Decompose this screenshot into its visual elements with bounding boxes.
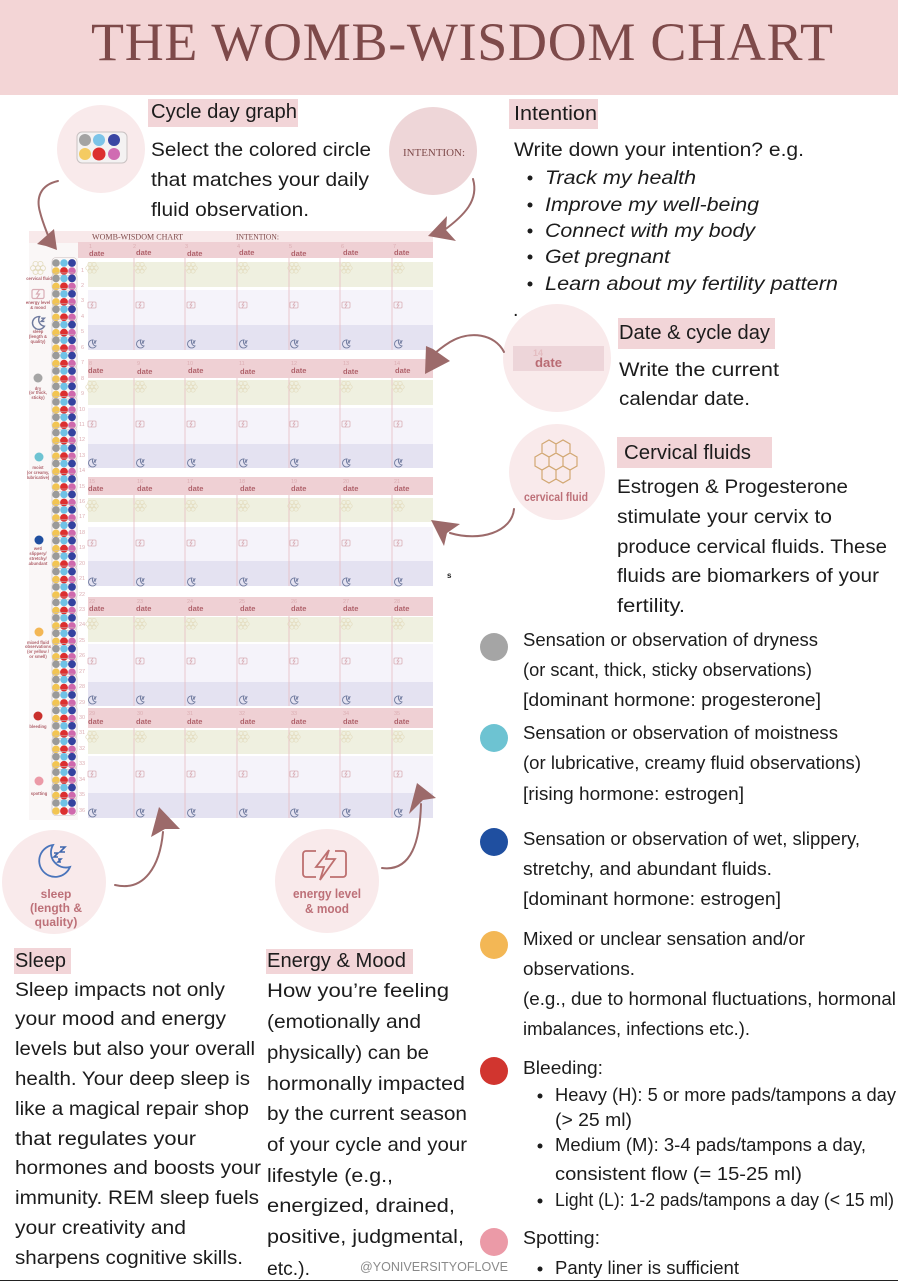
chart legend column: abundant [29, 561, 48, 566]
date cells: 5 [289, 244, 292, 250]
date cells: date [187, 717, 202, 726]
chart legend column: mixed fluid [27, 640, 49, 645]
legend: moistness: [rising hormone: estrogen] [523, 784, 744, 804]
row numbers: 35 [79, 792, 85, 798]
date cells: 31 [187, 711, 193, 717]
arrow: energy to chart [382, 783, 436, 868]
icon: sleep circle: (length & [30, 901, 82, 915]
chart legend column: (or creamy, [27, 470, 49, 475]
date cells: 7 [393, 244, 396, 250]
date cells: date [239, 248, 254, 257]
legend: wet: stretchy, and abundant fluids. [523, 859, 772, 879]
row numbers: 7 [81, 360, 84, 366]
row numbers: 31 [79, 730, 85, 736]
text: energy and mood: by the current season [267, 1103, 467, 1125]
chart legend column [25, 261, 52, 796]
legend: moistness: (or lubricative, creamy fluid observations) [523, 753, 861, 773]
text: cervical fluids: Estrogen & Progesterone [617, 476, 848, 498]
row numbers: 22 [79, 592, 85, 598]
womb-wisdom chart: WOMB-WISDOM CHART [92, 232, 183, 242]
row numbers: 32 [79, 746, 85, 752]
chart legend column: wet/ [33, 546, 43, 551]
date cells: 10 [187, 361, 193, 367]
date cells: date [188, 484, 203, 493]
row numbers: 18 [79, 530, 85, 536]
chart legend column: or smell) [29, 654, 47, 659]
legend: mixed: (e.g., due to hormonal fluctuations, hormonal [523, 989, 896, 1009]
text: energy and mood: physically) can be [267, 1042, 429, 1064]
icon: cervical fluid circle [509, 424, 605, 520]
date cells: 2 [133, 244, 136, 250]
date cells: 21 [394, 479, 400, 485]
date cells: date [88, 717, 103, 726]
legend: wet [480, 828, 860, 909]
date cells: date [240, 717, 255, 726]
date cells: 8 [89, 361, 92, 367]
chart legend column: lubricative) [27, 475, 50, 480]
row numbers: 12 [79, 437, 85, 443]
date cells: 15 [89, 479, 95, 485]
text: energy and mood: hormonally impacted [267, 1073, 465, 1095]
date cells: date [136, 604, 151, 613]
icon: intention circle: INTENTION: [403, 147, 465, 159]
date cells: 23 [137, 599, 143, 605]
text: intention list: Get pregnant [545, 246, 672, 268]
row numbers: 26 [79, 653, 85, 659]
text: cervical fluids: fertility. [617, 595, 685, 617]
row numbers: 21 [79, 576, 85, 582]
date cells: date [343, 248, 358, 257]
heading: energy and mood: Energy & Mood [267, 950, 406, 972]
chart legend column: stretchy/ [29, 556, 48, 561]
legend: dryness: (or scant, thick, sticky observations) [523, 660, 812, 680]
text: sleep: that regulates your [15, 1128, 197, 1150]
heading: date and cycle day: Date & cycle day [619, 322, 770, 344]
date cells [88, 244, 410, 726]
row numbers: 30 [79, 715, 85, 721]
date cells: 17 [187, 479, 193, 485]
date cells: date [188, 366, 203, 375]
date cells: 28 [394, 599, 400, 605]
row numbers: 13 [79, 453, 85, 459]
chart legend column: quality) [31, 339, 46, 344]
title banner: THE WOMB-WISDOM CHART [91, 12, 833, 72]
date cells: 33 [291, 711, 297, 717]
date cells: date [343, 367, 358, 376]
heading: cervical fluids: Cervical fluids [624, 442, 751, 464]
date cells: date [394, 717, 409, 726]
row numbers: 25 [79, 638, 85, 644]
legend: moistness: Sensation or observation of moistness [523, 723, 838, 743]
row numbers: 33 [79, 761, 85, 767]
row numbers: 28 [79, 684, 85, 690]
text: sleep: immunity. REM sleep fuels [15, 1187, 259, 1209]
legend: wet: Sensation or observation of wet, slippery, [523, 829, 860, 849]
date cells: date [394, 248, 409, 257]
text: date and cycle day: Write the current [619, 359, 780, 381]
chart legend column: (or thick, [29, 390, 47, 395]
date cells: 26 [291, 599, 297, 605]
chart legend column: (length & [29, 334, 47, 339]
text: sleep: like a magical repair shop [15, 1098, 249, 1120]
row numbers: 11 [79, 422, 85, 428]
arrow: cervical fluid to chart [431, 509, 514, 546]
chart legend column: slippery/ [29, 551, 47, 556]
date cells: date [137, 484, 152, 493]
text: energy and mood: (emotionally and [267, 1011, 421, 1033]
text: date and cycle day: calendar date. [619, 388, 750, 410]
text: cervical fluids: fluids are biomarkers of your [617, 565, 880, 587]
text: cycle day graph: that matches your daily [151, 169, 369, 191]
legend: spotting: Panty liner is sufficient [555, 1258, 739, 1278]
legend: bleeding: Bleeding: [523, 1058, 603, 1078]
week bands [78, 242, 433, 818]
row numbers: 4 [81, 314, 84, 320]
row numbers: 15 [79, 484, 85, 490]
heading: date and cycle day [618, 318, 775, 349]
date cells: date [343, 484, 358, 493]
legend: bleeding: consistent flow (= 15-25 ml) [555, 1164, 802, 1184]
row numbers: 10 [79, 407, 85, 413]
date cells: date [343, 717, 358, 726]
date cells: 30 [137, 711, 143, 717]
icon: energy and mood circle: & mood [305, 901, 349, 916]
date cells: date [395, 366, 410, 375]
text: cycle day graph [151, 139, 371, 221]
text: cervical fluids: stimulate your cervix to [617, 506, 832, 528]
row numbers: 5 [81, 329, 84, 335]
row numbers: 29 [79, 700, 85, 706]
legend: dryness: [dominant hormone: progesterone] [523, 690, 821, 710]
date cells: date [291, 484, 306, 493]
row numbers: 20 [79, 561, 85, 567]
heading: intention: Intention [514, 103, 597, 125]
row numbers: 16 [79, 499, 85, 505]
date cells: date [291, 717, 306, 726]
row numbers: 2 [81, 283, 84, 289]
date cells: 16 [137, 479, 143, 485]
date cells: 20 [343, 479, 349, 485]
chart legend column: dry [35, 386, 42, 391]
legend: wet: [dominant hormone: estrogen] [523, 889, 781, 909]
date cells: date [291, 604, 306, 613]
row numbers: 19 [79, 545, 85, 551]
date cells: date [240, 367, 255, 376]
date cells: 14 [394, 361, 400, 367]
icon: date circle: 14 [533, 348, 543, 358]
legend: bleeding: (> 25 ml) [555, 1110, 632, 1130]
stray letter: s [447, 571, 452, 580]
legend: bleeding [480, 1057, 896, 1210]
icon: sleep circle: sleep [41, 887, 71, 901]
row numbers: 6 [81, 345, 84, 351]
date cells: date [394, 604, 409, 613]
text: cycle day graph: Select the colored circle [151, 139, 371, 161]
text: sleep: hormones and boosts your [15, 1157, 262, 1179]
date cells: 9 [137, 361, 140, 367]
date cells: 25 [239, 599, 245, 605]
row numbers: 23 [79, 607, 85, 613]
womb-wisdom chart: INTENTION: [236, 232, 279, 242]
row numbers: 34 [79, 777, 85, 783]
row numbers: 3 [81, 298, 84, 304]
text: intention list: Learn about my fertility pattern [545, 273, 838, 295]
date cells: 11 [239, 361, 245, 367]
date cells: date [188, 604, 203, 613]
text: intention list: Improve my well-being [545, 194, 759, 216]
date cells: 35 [394, 711, 400, 717]
date cells: 13 [343, 361, 349, 367]
icon: cycle day palette circle [57, 105, 145, 193]
text: sleep: your mood and energy [15, 1008, 226, 1030]
text: sleep: Sleep impacts not only [15, 979, 225, 1001]
title banner [0, 0, 898, 95]
icon: energy and mood circle: energy level [293, 886, 361, 901]
icon: sleep circle [2, 830, 106, 934]
arrow: cycle day to chart [37, 181, 58, 250]
text: energy and mood: How you’re feeling [267, 980, 449, 1002]
cell icons [86, 262, 404, 817]
heading: cycle day graph: Cycle day graph [151, 101, 297, 123]
chart legend column: energy level [26, 300, 50, 305]
row numbers [79, 268, 85, 814]
date cells: 12 [291, 361, 297, 367]
legend: mixed [480, 929, 896, 1039]
chart legend column: spotting [31, 791, 48, 796]
text: intention list [513, 139, 838, 321]
date cells: 29 [89, 711, 95, 717]
date cells: 6 [341, 244, 344, 250]
icon: cervical fluid circle: cervical fluid [524, 490, 588, 504]
row numbers: 36 [79, 808, 85, 814]
icon: date circle [503, 304, 611, 412]
legend: mixed: observations. [523, 959, 635, 979]
text: sleep: levels but also your overall [15, 1038, 255, 1060]
text: intention list: Track my health [545, 167, 696, 189]
arrow: intention to chart [428, 179, 474, 241]
date cells: date [136, 717, 151, 726]
date cells: 22 [89, 599, 95, 605]
date cells: 34 [343, 711, 349, 717]
icon: intention circle [389, 107, 477, 195]
heading: intention [509, 99, 598, 129]
chart legend column: cervical fluid [26, 276, 52, 281]
row numbers: 17 [79, 514, 85, 520]
legend: bleeding: Medium (M): 3-4 pads/tampons a day, [555, 1135, 866, 1155]
date cells: 19 [291, 479, 297, 485]
text: energy and mood: etc.). [267, 1258, 310, 1280]
text: energy and mood: of your cycle and your [267, 1134, 468, 1156]
text: sleep [15, 979, 262, 1269]
date cells: date [89, 249, 104, 258]
legend: mixed: Mixed or unclear sensation and/or [523, 929, 805, 949]
text: sleep: health. Your deep sleep is [15, 1068, 250, 1090]
legend: spotting: Spotting: [523, 1228, 600, 1248]
text: intention list: Write down your intention? e.g. [514, 139, 804, 161]
legend: dryness [480, 630, 821, 710]
chart legend column: sleep [33, 329, 44, 334]
text: cervical fluids [617, 476, 887, 617]
chart legend column: & mood [30, 305, 46, 310]
heading: sleep: Sleep [15, 950, 66, 972]
icon: energy and mood circle [275, 829, 379, 933]
row numbers: 27 [79, 669, 85, 675]
heading: cervical fluids [617, 437, 772, 468]
date cells: 3 [185, 244, 188, 250]
legend: dryness: Sensation or observation of dryness [523, 630, 818, 650]
womb-wisdom chart [25, 231, 433, 820]
chart legend column: sticky) [31, 395, 45, 400]
legend: mixed: imbalances, infections etc.). [523, 1019, 750, 1039]
legend: moistness [480, 723, 861, 804]
date cells: 24 [187, 599, 193, 605]
date cells: date [291, 249, 306, 258]
text: cervical fluids: produce cervical fluids. These [617, 536, 887, 558]
text: cycle day graph: fluid observation. [151, 199, 309, 221]
row numbers: 8 [81, 376, 84, 382]
text: energy and mood: energized, drained, [267, 1195, 455, 1217]
date cells: date [88, 366, 103, 375]
icon: date circle: date [535, 355, 562, 370]
text: date and cycle day [619, 359, 780, 410]
date cells: date [137, 367, 152, 376]
credit handle: @YONIVERSITYOFLOVE [360, 1259, 508, 1274]
date cells: date [343, 604, 358, 613]
row numbers: 9 [81, 391, 84, 397]
date cells: date [187, 249, 202, 258]
text: energy and mood: positive, judgmental, [267, 1226, 464, 1248]
row numbers: 24 [79, 622, 85, 628]
arrow: date to chart [425, 335, 504, 374]
text: intention list: Connect with my body [545, 220, 756, 242]
date cells: date [394, 484, 409, 493]
date cells: 27 [343, 599, 349, 605]
date cells: 1 [89, 244, 92, 250]
chart legend column: (or yellow / [27, 649, 50, 654]
row numbers: 1 [81, 268, 84, 274]
date cells: 32 [239, 711, 245, 717]
date cells: 18 [239, 479, 245, 485]
date cells: date [89, 604, 104, 613]
row numbers: 14 [79, 468, 85, 474]
chart legend column: bleeding [29, 724, 47, 729]
date cells: date [240, 604, 255, 613]
chart legend column: moist [32, 465, 44, 470]
text: energy and mood [267, 980, 468, 1280]
legend: spotting [480, 1228, 739, 1278]
legend: bleeding: Light (L): 1-2 pads/tampons a day (< 15 ml) [555, 1190, 894, 1210]
text: intention list: . [513, 299, 518, 321]
date cells: date [240, 484, 255, 493]
text: energy and mood: lifestyle (e.g., [267, 1165, 393, 1187]
arrow: sleep to chart [115, 807, 180, 886]
cycle day circle palettes [52, 258, 77, 816]
date cells: date [136, 248, 151, 257]
date cells: date [291, 366, 306, 375]
text: sleep: your creativity and [15, 1217, 186, 1239]
icon: sleep circle: quality) [35, 915, 77, 929]
text: sleep: sharpens cognitive skills. [15, 1247, 243, 1269]
date cells: date [88, 484, 103, 493]
date cells: 4 [237, 244, 240, 250]
legend: bleeding: Heavy (H): 5 or more pads/tampons a day [555, 1085, 896, 1105]
chart legend column: observations [25, 644, 52, 649]
